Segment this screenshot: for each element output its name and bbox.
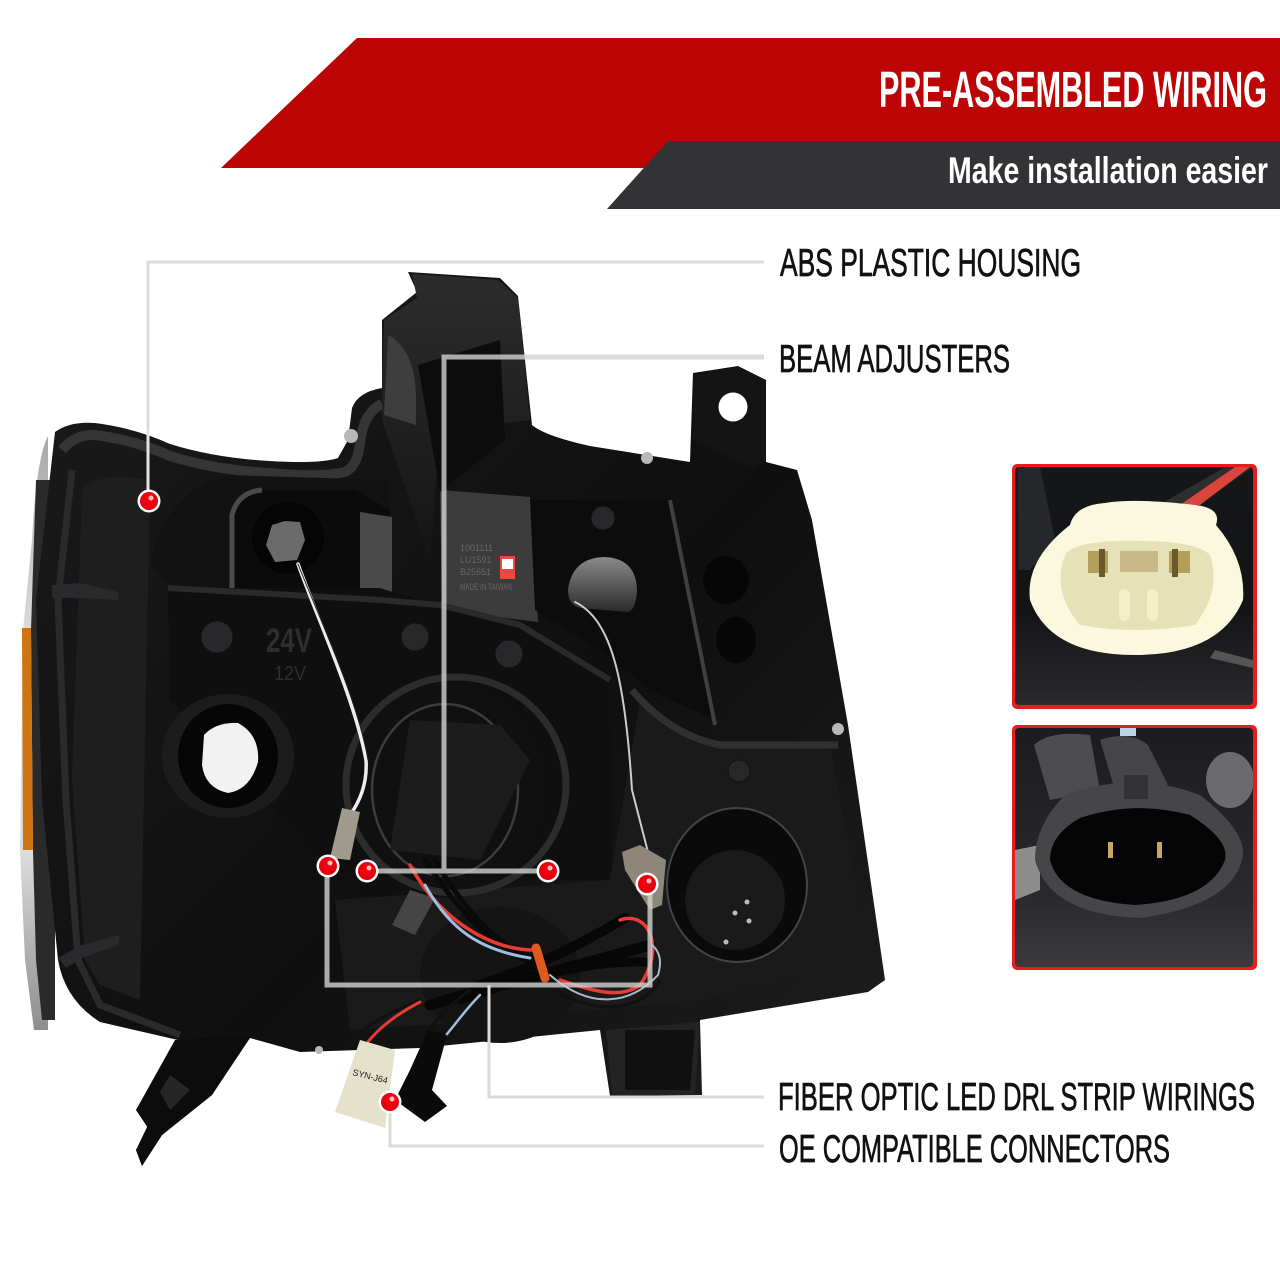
screws bbox=[344, 429, 358, 443]
black OE connector bbox=[395, 1030, 447, 1122]
label: beam adjusters: BEAM ADJUSTERS bbox=[779, 338, 1010, 381]
rim highlight bbox=[62, 404, 382, 475]
side mounting tab bbox=[693, 367, 765, 468]
marker: wiring left bbox=[316, 854, 340, 878]
photo inset: black connector bbox=[1012, 725, 1257, 970]
small label bbox=[460, 543, 515, 592]
amber and clear lens edge bbox=[20, 436, 55, 1030]
marker: adjuster right bbox=[536, 860, 560, 882]
leader line: ABS plastic housing bbox=[148, 262, 764, 500]
bottom mounting tab bbox=[606, 1022, 700, 1095]
embossed voltage mark bbox=[266, 622, 312, 685]
marker: wiring right bbox=[636, 872, 658, 896]
label: ABS plastic housing: ABS PLASTIC HOUSING bbox=[780, 242, 1081, 285]
lighter left wall bbox=[72, 477, 150, 1000]
right round cover bbox=[667, 808, 807, 962]
leader line: beam adjusters bbox=[367, 357, 764, 871]
left clips bbox=[52, 583, 118, 600]
leader line: OE connectors bbox=[390, 1105, 764, 1146]
inner panels bbox=[150, 475, 390, 590]
marker: housing bbox=[138, 490, 160, 512]
left bulb socket bbox=[162, 694, 294, 818]
tan quick connector bbox=[330, 808, 360, 860]
embossed voltage mark: 12V bbox=[274, 663, 307, 685]
small label: LU1591 bbox=[460, 555, 492, 565]
wires bbox=[298, 564, 660, 1050]
centre hole bbox=[568, 557, 637, 612]
lower left bracket bbox=[136, 1036, 250, 1166]
upper left socket bbox=[252, 502, 324, 574]
photo inset: cream connector bbox=[1012, 464, 1257, 709]
connector sticker text: SYN-J64 bbox=[352, 1067, 389, 1086]
dark subtitle banner bbox=[607, 141, 1280, 209]
grey clip bbox=[392, 890, 435, 935]
embossed voltage mark: 24V bbox=[266, 622, 312, 660]
tan right connector bbox=[622, 845, 666, 910]
small label: 1001111 bbox=[460, 543, 493, 553]
red title banner bbox=[221, 38, 1280, 168]
bosses bbox=[201, 506, 750, 782]
marker: connector bbox=[378, 1090, 402, 1114]
small label: MADE IN TAIWAN bbox=[460, 582, 512, 592]
lower oval cover bbox=[420, 907, 580, 1043]
leader line: fiber optic wirings bbox=[327, 871, 764, 1097]
housing body bbox=[36, 272, 885, 1166]
white OE connector bbox=[335, 1040, 395, 1128]
side holes bbox=[703, 556, 749, 604]
top mounting tab bbox=[382, 274, 530, 560]
marker: adjuster left bbox=[356, 860, 378, 882]
small label: B25651 bbox=[460, 567, 491, 577]
round projector cap bbox=[346, 677, 566, 898]
headlight photo illustration bbox=[20, 272, 885, 1166]
